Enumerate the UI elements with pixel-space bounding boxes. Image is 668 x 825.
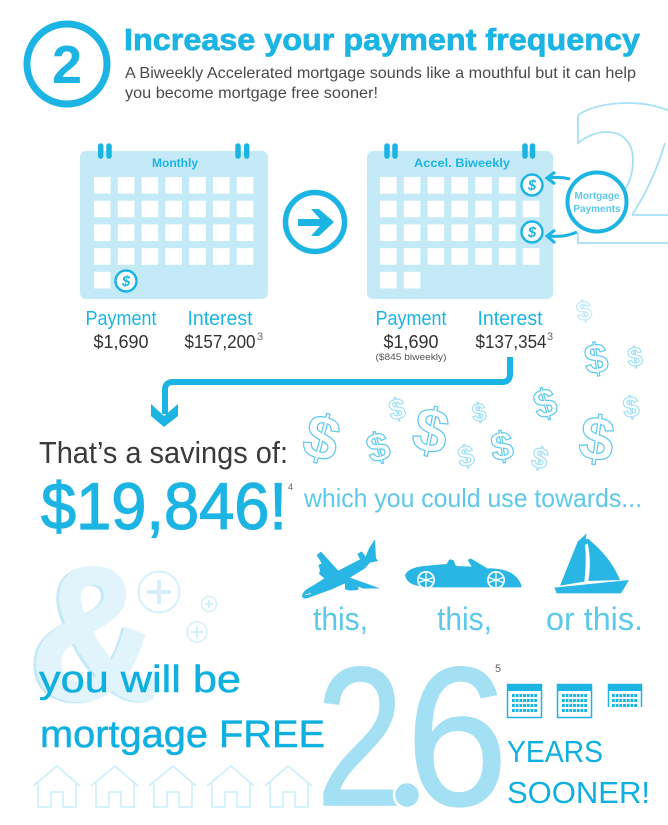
row of houses — [33, 766, 312, 807]
falling dollar signs: $ — [407, 394, 455, 469]
calendar rings — [387, 146, 532, 156]
savings amount: $19,846! — [41, 469, 287, 543]
monthly figures — [86, 308, 263, 352]
years sooner text — [507, 734, 650, 810]
intro text: A Biweekly Accelerated mortgage sounds like a mouthful but it can help — [125, 65, 636, 82]
panel: accelerated biweekly calendar — [367, 146, 553, 299]
plus circles — [138, 572, 216, 642]
falling dollar signs: $ — [488, 424, 516, 470]
biweekly figures: ($845 biweekly) — [376, 352, 447, 362]
calendar heading: Monthly — [152, 156, 198, 170]
falling dollar signs: $ — [529, 380, 562, 428]
monthly figures: $157,200 — [184, 332, 256, 352]
savings amount: 4 — [288, 482, 293, 492]
biweekly figures: Interest — [478, 308, 543, 330]
icon: plane — [302, 539, 380, 599]
falling dollar signs: $ — [529, 442, 551, 476]
icon: sailboat — [554, 533, 629, 593]
calendar day cells — [94, 185, 255, 280]
biweekly figures — [376, 308, 553, 362]
biweekly figures: $137,354 — [476, 332, 546, 352]
which you could use towards: which you could use towards... — [303, 483, 642, 513]
falling dollar signs: $ — [386, 393, 408, 427]
arrow between calendars — [286, 192, 344, 252]
payment coin — [116, 270, 136, 292]
biweekly figures: 3 — [547, 331, 553, 343]
falling dollar signs: $ — [296, 401, 347, 476]
year 1 — [507, 684, 542, 718]
panel: monthly calendar — [80, 146, 268, 299]
large 2.6 figure: 5 — [495, 663, 501, 675]
this, this, or this labels: or this. — [546, 601, 643, 637]
monthly figures: $1,690 — [93, 332, 149, 352]
big outlined number 2 backdrop — [578, 103, 668, 243]
this, this, or this labels — [313, 601, 643, 637]
payment coin top: $ — [527, 177, 537, 194]
mini calendar icons — [507, 684, 642, 718]
payment coin bottom: $ — [527, 224, 537, 241]
large 2.6 figure — [316, 626, 508, 825]
mortgage payments callout — [568, 172, 626, 232]
years sooner text: SOONER! — [507, 775, 650, 810]
falling dollar signs — [296, 295, 644, 476]
falling dollar signs: $ — [621, 391, 641, 425]
mortgage payments callout: Mortgage — [574, 191, 620, 202]
title: Increase your payment frequency — [124, 22, 641, 57]
falling dollar signs: $ — [626, 341, 644, 373]
falling dollar signs: $ — [362, 424, 395, 472]
falling dollar signs: $ — [455, 440, 477, 474]
arrows to coins — [547, 172, 577, 243]
calendar heading: Accel. Biweekly — [414, 156, 510, 170]
biweekly figures: Payment — [376, 308, 447, 330]
header: numbered circle — [27, 24, 107, 104]
calendar rings — [101, 146, 247, 156]
this, this, or this labels: this, — [313, 601, 368, 637]
payment coin top — [522, 174, 542, 196]
monthly figures: 3 — [257, 331, 263, 343]
mortgage payments callout: Payments — [573, 204, 621, 215]
intro text: you become mortgage free sooner! — [125, 85, 378, 102]
falling dollar signs: $ — [575, 403, 619, 476]
payment coin: $ — [121, 273, 131, 290]
monthly figures: Interest — [188, 308, 253, 330]
monthly figures: Payment — [86, 308, 157, 330]
partial year — [608, 684, 642, 707]
you will be mortgage free text: you will be — [39, 659, 241, 701]
biweekly figures: $1,690 — [383, 332, 439, 352]
falling dollar signs: $ — [581, 334, 611, 383]
connector arrow to savings — [151, 357, 510, 427]
icon: car — [405, 558, 522, 589]
payment coin bottom — [522, 222, 542, 242]
header: numbered circle: 2 — [52, 35, 82, 95]
falling dollar signs: $ — [574, 295, 594, 327]
falling dollar signs: $ — [470, 398, 488, 428]
years sooner text: YEARS — [507, 734, 603, 769]
you will be mortgage free text — [39, 659, 325, 756]
savings heading: That’s a savings of: — [39, 435, 288, 470]
you will be mortgage free text: mortgage FREE — [40, 714, 325, 756]
year 2 — [557, 684, 592, 718]
intro text — [125, 65, 636, 102]
this, this, or this labels: this, — [437, 601, 492, 637]
calendar day cells — [380, 185, 541, 280]
large ampersand: & — [30, 528, 158, 740]
